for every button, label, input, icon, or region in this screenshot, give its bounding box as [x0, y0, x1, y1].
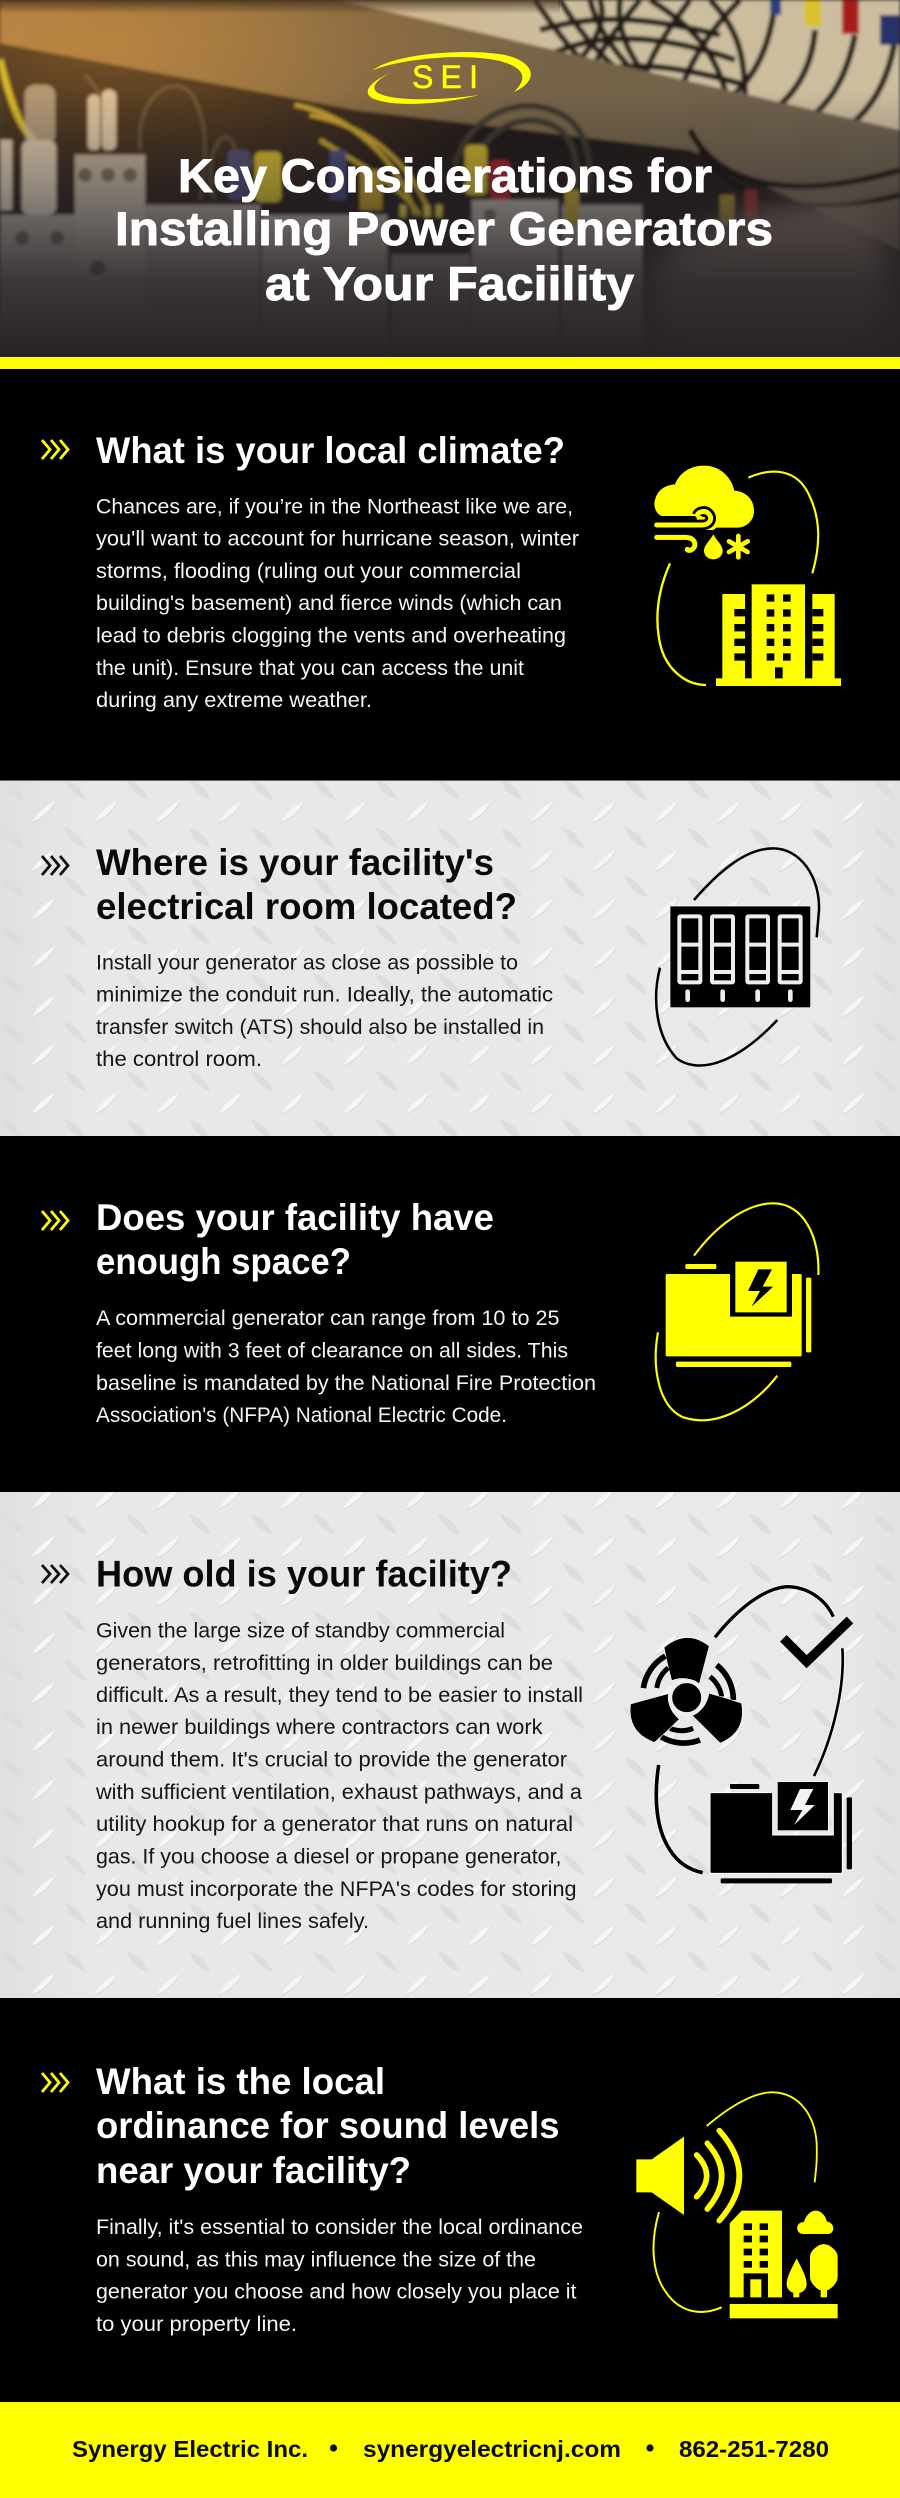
body text: facility age: utility hookup for a generator that runs on natural	[96, 1813, 573, 1836]
heading: enough space	[96, 1197, 494, 1282]
body text: sound ordinance: generator you choose and how closely you place it	[96, 2281, 577, 2304]
body text: climate: Chances are, if you’re in the Northeast like we are,	[96, 495, 573, 518]
panel: facility age	[0, 1492, 900, 1998]
footer: website: synergyelectricnj.com	[363, 2436, 621, 2462]
chevron icon	[42, 856, 68, 875]
footer: separator dot	[330, 2444, 337, 2452]
heading: facility age: How old is your facility?	[96, 1554, 512, 1595]
logo: SEI: SEI	[412, 59, 483, 95]
body text: enough space: A commercial generator can range from 10 to 25	[96, 1307, 560, 1330]
body text: electrical room: transfer switch (ATS) should also be installed in	[96, 1016, 544, 1039]
body text: facility age: difficult. As a result, they tend to be easier to install	[96, 1684, 583, 1707]
icon: storm cloud and building	[653, 466, 841, 686]
body text: climate: during any extreme weather.	[96, 689, 372, 712]
heading: sound ordinance: ordinance for sound levels	[96, 2105, 560, 2146]
body text: enough space: feet long with 3 feet of clearance on all sides. This	[96, 1339, 568, 1362]
body text: enough space	[96, 1307, 596, 1427]
title	[115, 149, 773, 310]
chevron icon	[42, 1211, 68, 1230]
footer: separator dot	[646, 2444, 654, 2452]
heading: sound ordinance	[96, 2061, 560, 2191]
title: Key Considerations for	[178, 149, 712, 202]
icon: transfer switch	[656, 848, 819, 1065]
title: at Your Faciility	[265, 257, 634, 310]
body text: facility age: around them. It's crucial to provide the generator	[96, 1749, 567, 1772]
heading: enough space: Does your facility have	[96, 1197, 494, 1238]
heading: climate: What is your local climate?	[96, 430, 565, 471]
body text: facility age: and running fuel lines safely.	[96, 1910, 369, 1933]
heading: sound ordinance: near your facility?	[96, 2150, 411, 2191]
chevron icon	[42, 1565, 68, 1583]
body text: facility age: Given the large size of standby commercial	[96, 1619, 505, 1642]
header photo: electrical panel wiring	[0, 0, 900, 357]
body text: enough space: baseline is mandated by the National Fire Protection	[96, 1372, 596, 1395]
body text: sound ordinance: Finally, it's essential to consider the local ordinance	[96, 2216, 583, 2239]
body text: facility age: with sufficient ventilation, exhaust pathways, and a	[95, 1781, 582, 1804]
body text: facility age: gas. If you choose a diesel or propane generator,	[96, 1846, 562, 1869]
heading: sound ordinance: What is the local	[96, 2061, 385, 2102]
heading: electrical room: Where is your facility's	[96, 842, 494, 883]
body text: sound ordinance	[96, 2216, 583, 2336]
yellow divider bar	[0, 357, 900, 369]
chevron icon	[42, 440, 68, 459]
chevron icon	[42, 2073, 68, 2092]
icon: speaker and building	[636, 2092, 838, 2318]
heading: electrical room: electrical room located?	[96, 886, 517, 927]
panel: enough space	[0, 1136, 900, 1492]
body text: facility age	[95, 1619, 583, 1933]
panel: electrical room	[0, 780, 900, 1136]
body text: electrical room	[96, 951, 553, 1071]
body text: climate: the unit). Ensure that you can access the unit	[96, 657, 524, 680]
body text: electrical room: Install your generator as close as possible to	[96, 951, 518, 974]
panel: sound ordinance	[0, 1998, 900, 2402]
body text: climate: lead to debris clogging the vents and overheating	[96, 625, 566, 648]
icon: fan, check mark and generator	[611, 1587, 852, 1883]
icon: generator	[656, 1203, 818, 1420]
body text: enough space: Association's (NFPA) National Electric Code.	[96, 1404, 507, 1427]
title: Installing Power Generators	[115, 202, 773, 255]
panel: local climate	[0, 369, 900, 780]
footer bar	[0, 2402, 900, 2498]
heading: enough space: enough space?	[96, 1241, 351, 1282]
body text: climate	[96, 495, 579, 712]
heading: electrical room	[96, 842, 517, 927]
body text: facility age: you must incorporate the NFPA's codes for storing	[96, 1878, 576, 1901]
body text: sound ordinance: to your property line.	[96, 2313, 297, 2336]
logo: SEI	[368, 52, 531, 104]
body text: facility age: in newer buildings where contractors can work	[96, 1716, 543, 1739]
footer: phone: 862-251-7280	[679, 2436, 829, 2462]
body text: sound ordinance: on sound, as this may influence the size of the	[96, 2249, 536, 2272]
body text: climate: you'll want to account for hurricane season, winter	[96, 528, 579, 550]
footer: company name: Synergy Electric Inc.	[72, 2436, 308, 2462]
body text: facility age: generators, retrofitting in older buildings can be	[96, 1652, 553, 1675]
body text: electrical room: the control room.	[96, 1048, 262, 1071]
body text: climate: storms, flooding (ruling out your commercial	[96, 560, 521, 583]
body text: climate: building's basement) and fierce winds (which can	[96, 592, 562, 615]
body text: electrical room: minimize the conduit run. Ideally, the automatic	[96, 984, 553, 1007]
